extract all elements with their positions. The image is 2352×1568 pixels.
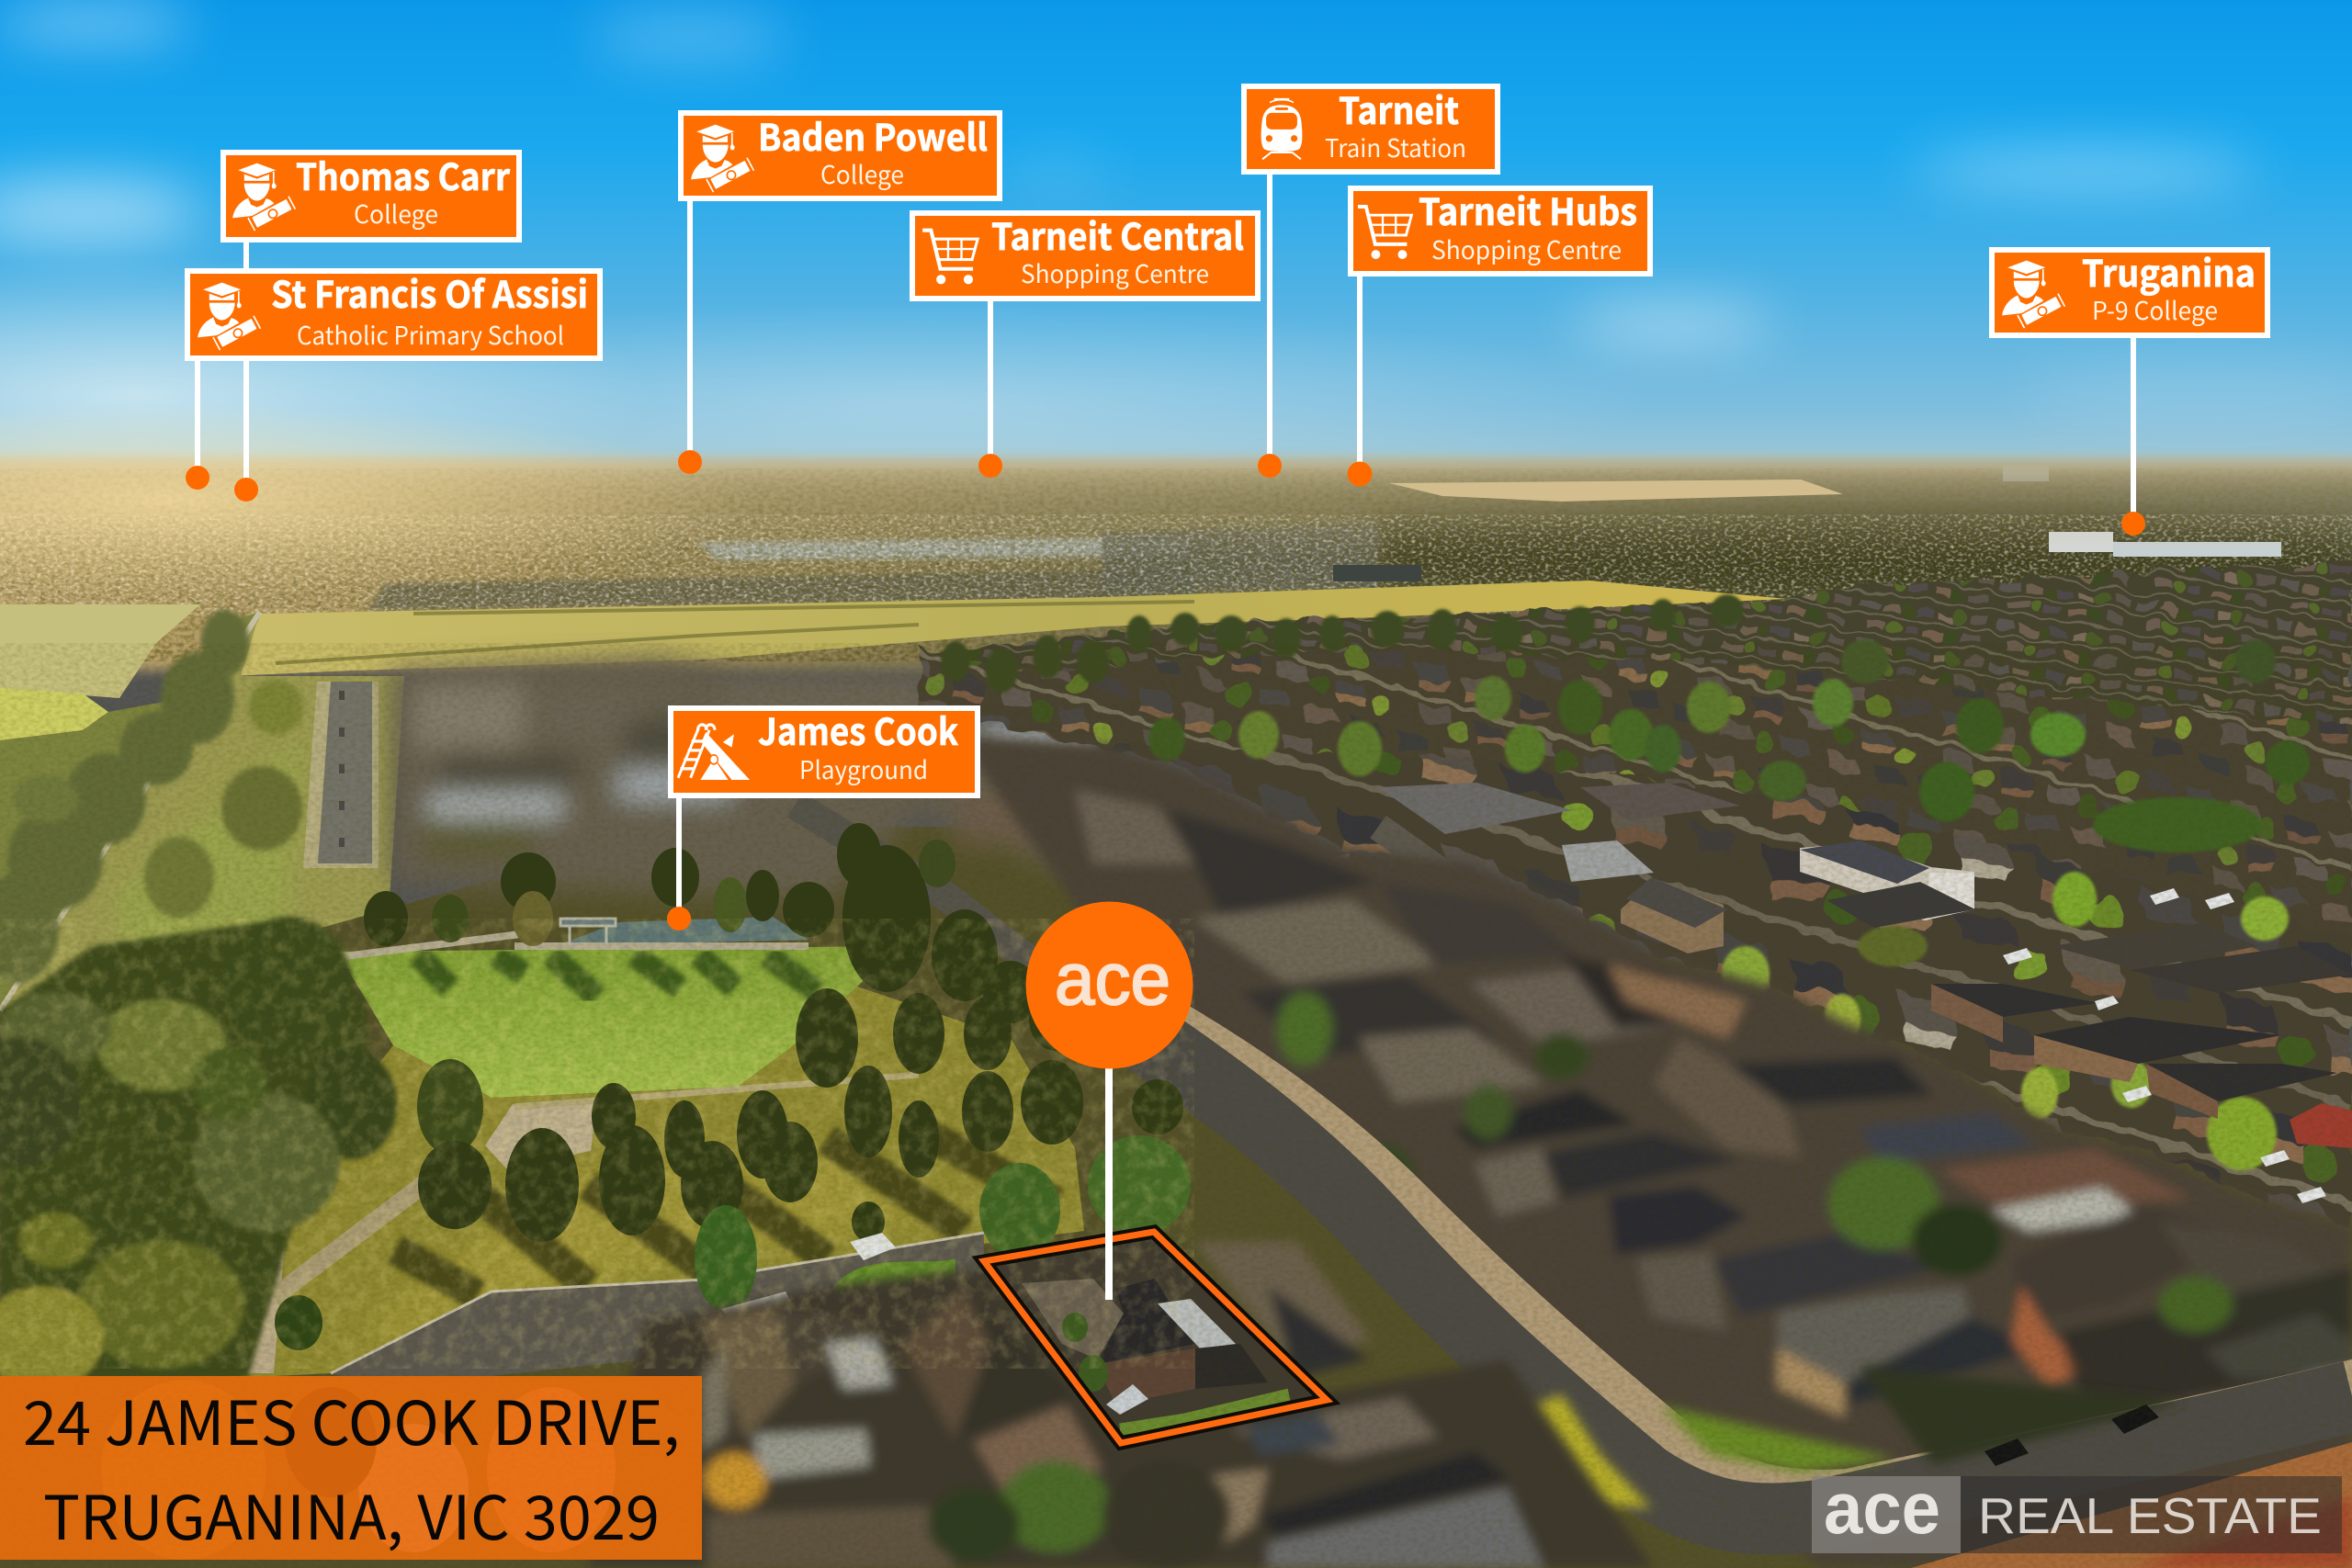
label subtitle: College	[820, 155, 904, 191]
pin circle	[1025, 902, 1193, 1069]
icon: playground slide	[678, 725, 750, 780]
hedge beside the road	[834, 1258, 956, 1295]
logo: ace real estate	[1812, 1467, 2342, 1553]
dry parkland	[239, 987, 1084, 1378]
blurred middle houses	[390, 657, 1102, 900]
side street with cars	[303, 682, 379, 868]
address line 1: 24 JAMES COOK DRIVE,	[23, 1375, 680, 1463]
label box	[671, 708, 978, 795]
label: Tarneit Central Shopping Centre	[912, 208, 1258, 478]
location dot	[667, 907, 691, 931]
pin stem	[1105, 1061, 1113, 1300]
icon: train	[1261, 99, 1302, 159]
far left paddock	[0, 604, 200, 698]
label: St Francis Of Assisi Catholic Primary School	[186, 265, 600, 490]
leader line	[988, 301, 993, 459]
label subtitle: Playground	[799, 750, 928, 786]
sky	[0, 0, 2352, 482]
location dot	[234, 478, 258, 502]
left forest	[0, 917, 397, 1390]
icon: shopping cart	[1358, 207, 1411, 259]
subject house inside the boundary	[984, 1232, 1327, 1443]
park trees	[275, 823, 1191, 1350]
leader line	[1267, 175, 1272, 459]
label box	[681, 113, 1000, 198]
distant dark tree belt	[1378, 510, 2352, 597]
label box	[223, 152, 519, 240]
label name: James Cook	[758, 703, 958, 756]
tree line along the field	[941, 594, 1744, 693]
label box	[1992, 250, 2267, 335]
cars on the road	[1984, 1404, 2159, 1466]
location dot	[186, 466, 209, 490]
label: Thomas Carr College	[223, 148, 519, 502]
tree belt along the path	[0, 610, 303, 983]
blurred upper houses beside the pin	[956, 735, 2352, 1568]
concrete court and paths	[485, 1098, 597, 1168]
label subtitle: Catholic Primary School	[297, 316, 564, 352]
logo dark strip	[1812, 1476, 2342, 1553]
sandy far paddock	[1389, 479, 1843, 502]
label: Tarneit Hubs Shopping Centre	[1347, 183, 1650, 487]
label box	[1244, 86, 1498, 172]
label subtitle: Shopping Centre	[1021, 254, 1209, 290]
leader line	[2131, 338, 2136, 514]
leader line	[195, 361, 200, 469]
tree shadows on the lawn	[418, 955, 818, 997]
label subtitle: Shopping Centre	[1431, 231, 1622, 266]
icon: shopping cart	[922, 231, 978, 284]
leader line	[687, 201, 693, 455]
label subtitle: P-9 College	[2092, 291, 2218, 327]
scattered suburb trees	[1148, 639, 2310, 1170]
clear nearby houses	[1378, 783, 2352, 1203]
front gardens by the road	[1498, 1366, 2184, 1508]
panel background	[0, 1376, 702, 1560]
cars at the edge of the blur	[1118, 853, 1350, 891]
location dot	[978, 454, 1002, 478]
blurred houses along the bottom	[588, 1242, 1654, 1568]
leader line	[243, 243, 249, 479]
ground texture	[0, 643, 2352, 1568]
location dot	[678, 450, 702, 474]
horizon haze and low sun glare	[0, 457, 2352, 558]
label: Baden Powell College	[678, 108, 1000, 474]
white vehicles in the street	[721, 1233, 896, 1323]
icon: graduate	[691, 125, 754, 193]
street behind the blurred houses	[795, 805, 1034, 964]
distant town band	[0, 464, 2352, 671]
label name: St Francis Of Assisi	[271, 265, 588, 319]
label box	[912, 213, 1258, 299]
curving street	[331, 1233, 984, 1387]
label name: Tarneit Central	[991, 208, 1244, 261]
foliage behind the address panel	[0, 1376, 702, 1560]
ground left of the diagonal path	[0, 612, 260, 1010]
map pin: ace property marker	[1025, 902, 1193, 1300]
logo light tab	[1812, 1476, 1961, 1553]
location dot	[1347, 461, 1373, 487]
ground below the road at lower right	[1911, 1442, 2352, 1568]
location dot	[2121, 512, 2145, 536]
address line 2: TRUGANINA, VIC 3029	[43, 1470, 660, 1558]
address panel	[0, 1375, 702, 1560]
central field strip	[230, 581, 1787, 676]
sharp suburb houses	[917, 558, 2352, 1227]
label subtitle: College	[354, 195, 438, 231]
property boundary outline	[984, 1232, 1327, 1443]
far buildings	[2049, 532, 2113, 552]
playground pad	[555, 917, 808, 946]
location dot	[1258, 454, 1282, 478]
label name: Baden Powell	[758, 108, 988, 162]
label name: Tarneit Hubs	[1419, 183, 1637, 236]
label name: Truganina	[2082, 244, 2256, 298]
playground shelter	[560, 919, 616, 944]
leader line	[1357, 276, 1363, 465]
leader line	[676, 798, 682, 910]
icon: graduate	[198, 283, 261, 351]
sunlit oval	[0, 688, 108, 740]
label name: Tarneit	[1339, 82, 1459, 135]
long tree shadows	[395, 1130, 1057, 1295]
ground right of the diagonal path	[0, 612, 404, 1029]
label subtitle: Train Station	[1325, 129, 1466, 164]
label: James Cook Playground	[667, 703, 978, 931]
logo real estate: REAL ESTATE	[1978, 1487, 2322, 1544]
icon: graduate	[232, 164, 296, 231]
clouds	[0, 6, 2352, 432]
label box	[187, 271, 600, 358]
diagonal path	[0, 612, 260, 1010]
distant rooftops	[698, 537, 1194, 560]
label name: Thomas Carr	[296, 148, 511, 201]
logo ace: ace	[1824, 1467, 1940, 1549]
label: Tarneit Train Station	[1244, 82, 1498, 478]
base of the lower ground	[0, 827, 2352, 1568]
park footpath	[337, 934, 808, 957]
ace logo in pin: ace	[1055, 938, 1170, 1020]
label box	[1351, 188, 1650, 274]
park lawn	[337, 946, 900, 1098]
icon: graduate	[2002, 261, 2065, 329]
curved residential road and footpath	[1034, 956, 2352, 1519]
label: Truganina P-9 College	[1992, 244, 2267, 536]
